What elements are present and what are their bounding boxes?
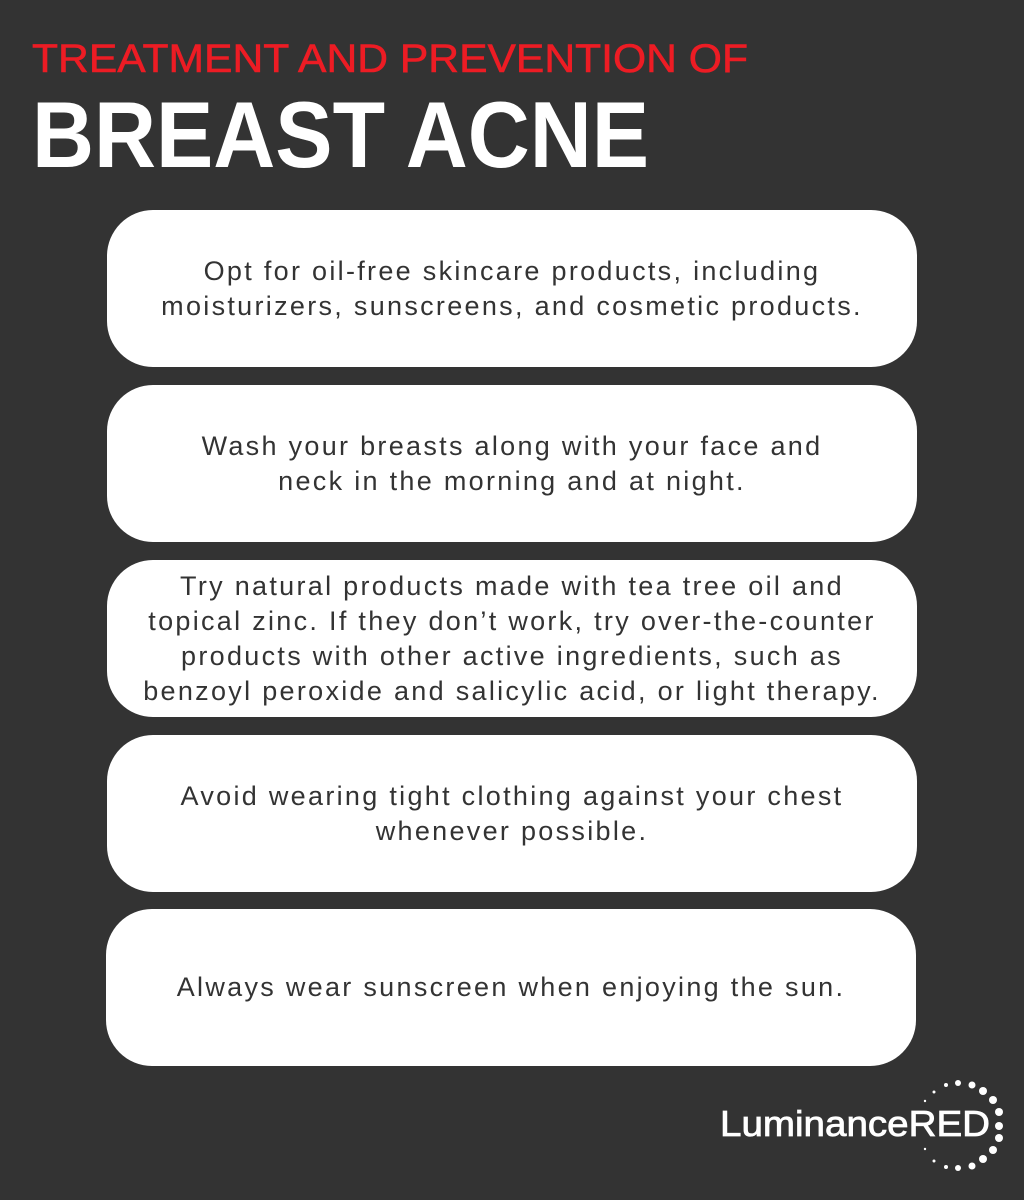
- card 3: products with other active ingredients, such as: [181, 640, 843, 670]
- card 1: [107, 210, 917, 367]
- logo: LuminanceRED: [720, 1080, 1003, 1171]
- title: [32, 37, 748, 187]
- logo: LuminanceRED: LuminanceRED: [720, 1103, 990, 1144]
- card 4: whenever possible.: [376, 816, 648, 846]
- card 3: Try natural products made with tea tree oil and: [180, 570, 844, 600]
- heading: breast acne: BREAST ACNE: [32, 82, 649, 187]
- card 4: [107, 735, 917, 892]
- card 1: moisturizers, sunscreens, and cosmetic products.: [161, 290, 863, 320]
- card 5: [106, 909, 916, 1066]
- card 1: Opt for oil-free skincare products, including: [204, 256, 820, 286]
- card 3: [107, 560, 917, 717]
- card 3: benzoyl peroxide and salicylic acid, or light therapy.: [143, 676, 881, 706]
- card 5: Always wear sunscreen when enjoying the sun.: [177, 972, 845, 1002]
- card 3: topical zinc. If they don’t work, try over-the-counter: [148, 606, 876, 636]
- card 2: Wash your breasts along with your face and: [202, 430, 822, 460]
- subtitle: treatment and prevention of: TREATMENT AND PREVENTION OF: [32, 37, 748, 81]
- card 2: neck in the morning and at night.: [278, 466, 746, 496]
- card 4: Avoid wearing tight clothing against your chest: [181, 780, 843, 810]
- card 2: [107, 385, 917, 542]
